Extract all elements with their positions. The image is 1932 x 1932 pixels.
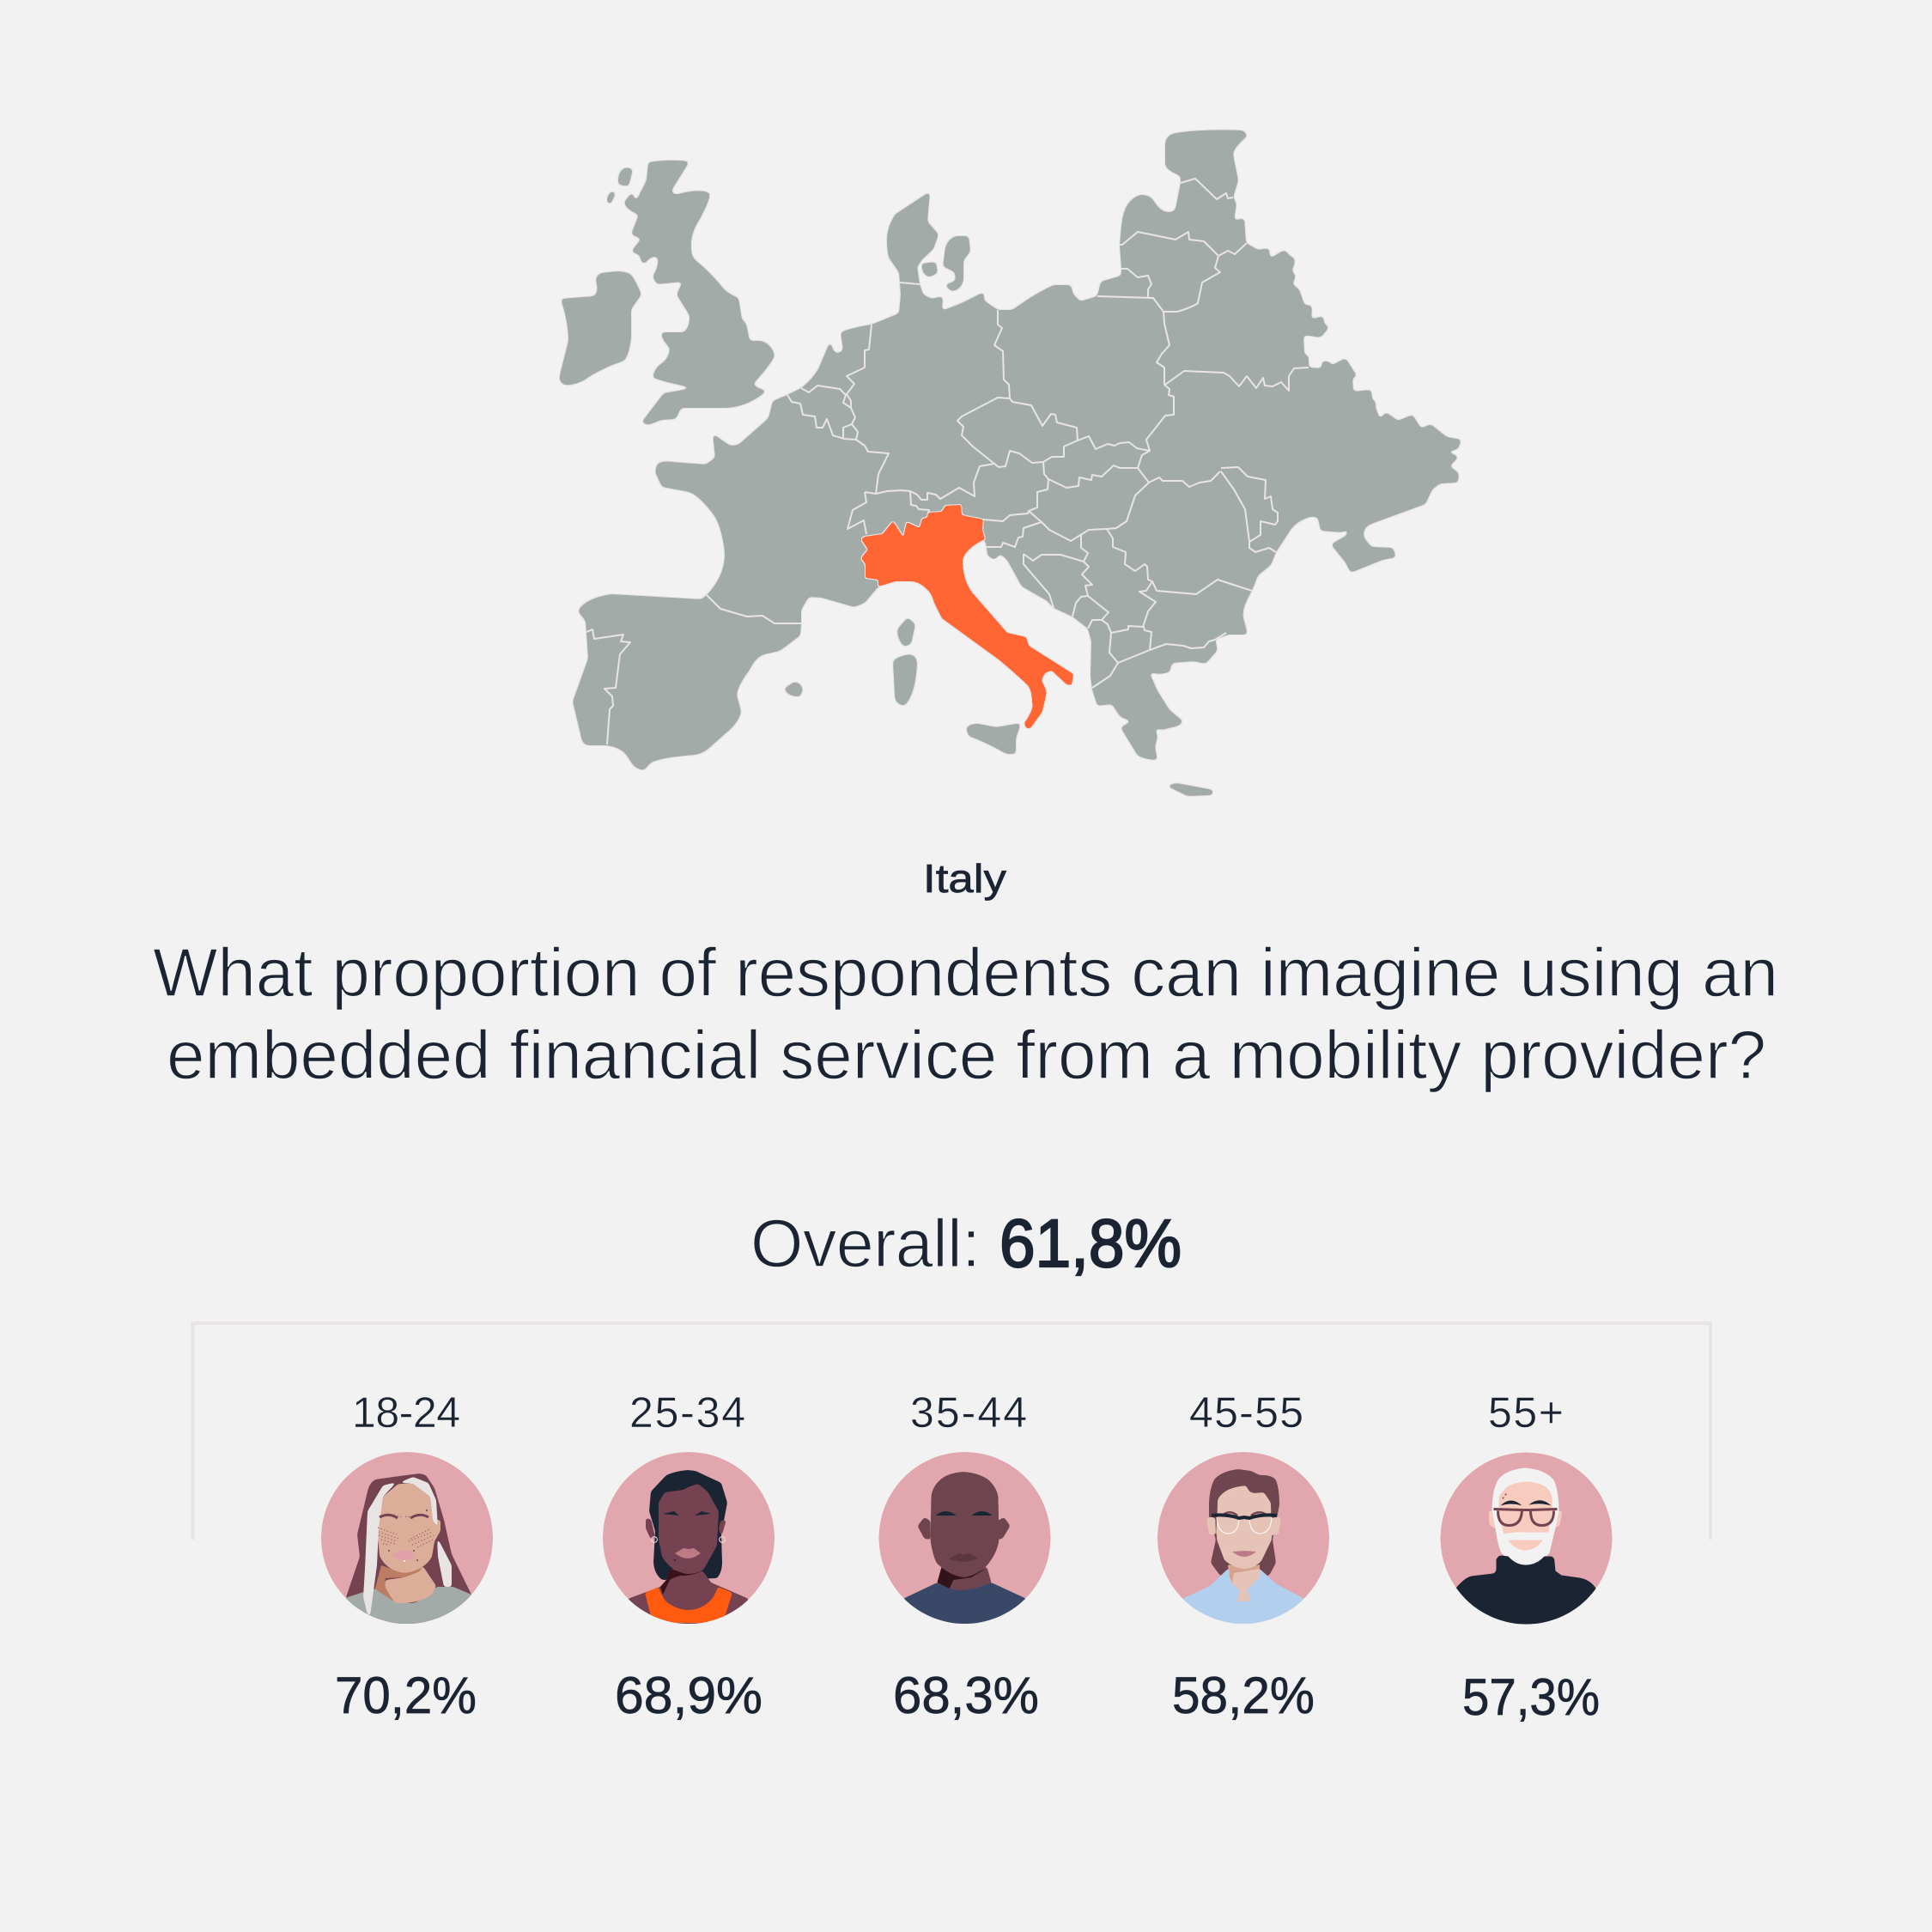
Italy highlighted [861,505,1073,728]
map of Europe [560,130,1461,796]
question heading: embedded financial service from a mobility provider? [167,1017,1766,1093]
age group 25-34: 68,9% [615,1667,762,1724]
Danish islands [921,236,970,291]
overall figure: Overall: [750,1205,981,1281]
Hebrides islands [607,167,633,204]
Ireland [560,271,641,385]
question heading [153,934,1778,1093]
continental Europe [573,130,1461,770]
avatar: woman with long hair and freckles [321,1452,493,1632]
Crimea [1331,531,1396,573]
age group 45-55: 58,2% [1172,1667,1315,1724]
Mediterranean islands [784,617,1213,796]
avatar: bald man in navy shirt [879,1452,1051,1632]
avatar: woman with glasses and blue shirt [1157,1452,1329,1632]
avatar: older man with white beard and turtleneck [1441,1453,1613,1633]
age group 25-34: 25-34 [629,1388,745,1437]
age group 55+: 55+ [1488,1388,1564,1437]
age group 25-34 [603,1388,775,1724]
overall figure [750,1205,1182,1281]
country borders [586,179,1309,744]
age group 18-24: 70,2% [335,1667,477,1724]
age group 35-44: 68,3% [893,1667,1039,1724]
land masses [560,130,1461,796]
age group 35-44 [879,1388,1051,1724]
age group 45-55: 45-55 [1189,1388,1303,1437]
avatar: woman with dark hair and orange top [603,1452,775,1632]
age group 45-55 [1157,1388,1329,1724]
question heading: What proportion of respondents can imagine using an [153,934,1778,1011]
Great Britain [624,161,775,425]
bracket connecting overall to age groups [192,1323,1710,1540]
country label: Italy: Italy [923,856,1006,901]
age group 55+ [1441,1388,1613,1726]
age group 35-44: 35-44 [910,1388,1027,1437]
age group 55+: 57,3% [1462,1668,1600,1726]
overall figure: 61,8% [999,1205,1182,1281]
age group 18-24: 18-24 [352,1388,460,1437]
age group 18-24 [321,1388,493,1724]
